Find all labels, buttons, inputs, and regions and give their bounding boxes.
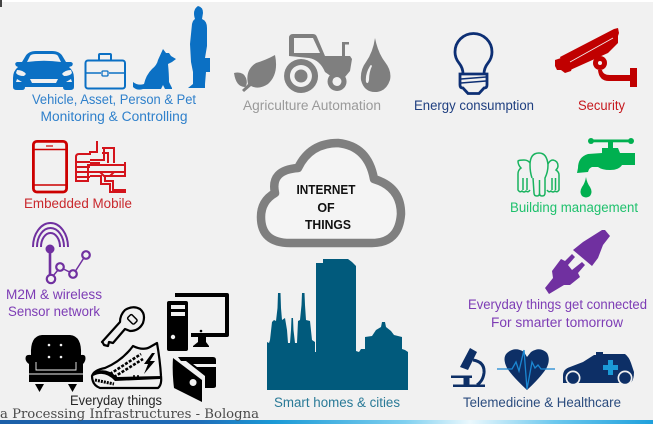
icon: microscope: [451, 348, 485, 387]
label: monitoring text: Monitoring & Controlling: [40, 109, 188, 124]
group: vehicle, asset, person and pet: [13, 6, 210, 124]
icon: light bulb: [455, 34, 492, 94]
label: sensor network text: Sensor network: [8, 304, 100, 319]
icon: wireless sensor network: [33, 223, 90, 283]
icon: plug and socket: [545, 230, 610, 294]
icon: cloud outline: [261, 143, 401, 243]
group: embedded mobile: [24, 141, 132, 211]
group: telemedicine and healthcare: [451, 348, 634, 410]
icon: armchair: [25, 335, 86, 392]
icon: water drop: [361, 38, 390, 92]
icon: sneaker: [92, 343, 161, 388]
label: energy text: Energy consumption: [414, 98, 534, 113]
footer caption: a Processing Infrastructures - Bologna: [0, 407, 259, 422]
label: smart homes text: Smart homes & cities: [274, 395, 400, 410]
icon: security camera: [555, 28, 637, 87]
icon: desktop computer: [167, 293, 229, 351]
icon: tractor: [284, 34, 352, 93]
label: telemedicine text: Telemedicine & Healthcare: [463, 395, 621, 410]
group: agriculture automation: [234, 34, 390, 113]
group: everyday things get connected: [468, 230, 647, 330]
label: things: THINGS: [305, 218, 351, 232]
icon: briefcase: [86, 54, 125, 88]
icon: wallet: [173, 357, 216, 402]
icon: city skyline: [267, 259, 408, 390]
group: everyday things: [25, 293, 229, 408]
group: energy consumption: [414, 34, 534, 113]
icon: standing person with bag: [188, 6, 210, 88]
icon: key: [102, 307, 144, 346]
icon: dripping tap: [577, 138, 635, 198]
corner mark: [0, 0, 2, 7]
label: smarter tomorrow text: For smarter tomorrow: [491, 315, 623, 330]
icon: smartphone: [33, 141, 67, 192]
label: building management text: Building management: [510, 200, 638, 215]
icon: circuit chip: [76, 141, 125, 192]
icon: dog: [133, 49, 176, 90]
label: everyday things text: Everyday things: [70, 393, 162, 408]
label: security text: Security: [578, 98, 625, 113]
group: smart homes and cities: [267, 259, 408, 410]
label: of: OF: [317, 201, 335, 215]
label: internet: INTERNET: [296, 183, 356, 197]
icon: leaves: [234, 55, 276, 92]
icon: group of people: [518, 153, 559, 196]
group: M2M and wireless sensor network: [6, 223, 102, 319]
icon: heart with pulse: [497, 349, 555, 390]
group: building management: [510, 138, 638, 215]
bottom gradient bar: [0, 420, 653, 424]
group: security: [555, 28, 637, 113]
icon: car: [13, 51, 74, 90]
label: M2M text: M2M & wireless: [6, 287, 102, 302]
label: agriculture text: Agriculture Automation: [243, 98, 381, 113]
group: internet of things cloud: [261, 143, 401, 243]
label: vehicle text: Vehicle, Asset, Person & Pet: [32, 92, 196, 107]
label: embedded mobile text: Embedded Mobile: [24, 196, 132, 211]
icon: ambulance: [563, 352, 634, 386]
label: connected text: Everyday things get connected: [468, 297, 647, 312]
